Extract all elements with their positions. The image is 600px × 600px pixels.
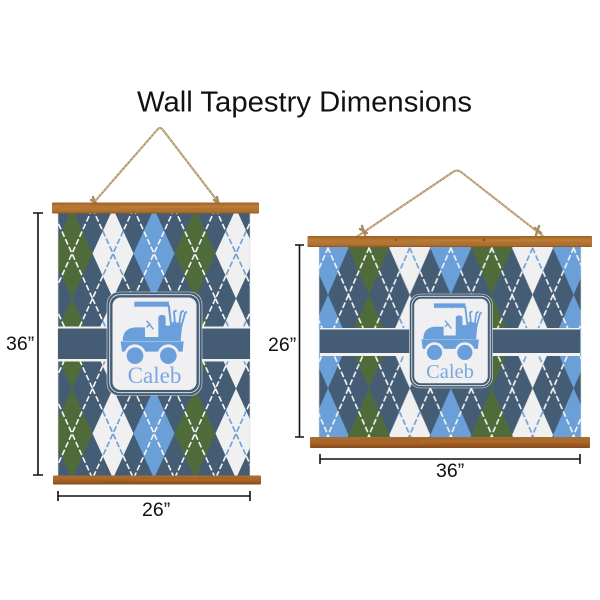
icon: golf cart [421, 303, 482, 360]
hanging rope: landscape [352, 170, 548, 240]
icon: golf cart [121, 302, 187, 364]
dimension: landscape width: 36” [436, 460, 464, 482]
dimension: landscape width [320, 454, 580, 482]
dimension: portrait height: 36” [6, 333, 34, 355]
dimension: landscape height [268, 245, 304, 437]
fabric: landscape argyle [319, 245, 581, 438]
portrait tapestry [52, 128, 261, 484]
personalised name: Caleb [128, 363, 181, 388]
personalised name: Caleb [426, 361, 474, 383]
badge: landscape [410, 294, 492, 388]
title: Wall Tapestry Dimensions [137, 87, 472, 119]
bottom wooden bar: landscape [310, 437, 590, 448]
landscape tapestry [308, 170, 592, 448]
dimension: portrait height [6, 213, 43, 475]
hanging rope: portrait [90, 128, 222, 207]
top wooden bar: landscape [308, 236, 592, 247]
badge: portrait [107, 292, 202, 396]
band: landscape [320, 328, 580, 356]
bottom wooden bar: portrait [53, 476, 261, 484]
fabric: portrait argyle [58, 210, 250, 476]
dimension: landscape height: 26” [268, 334, 296, 356]
dimension: portrait width: 26” [142, 499, 170, 521]
top wooden bar: portrait [52, 202, 259, 214]
dimension: portrait width [58, 491, 250, 521]
band: portrait [58, 326, 250, 362]
